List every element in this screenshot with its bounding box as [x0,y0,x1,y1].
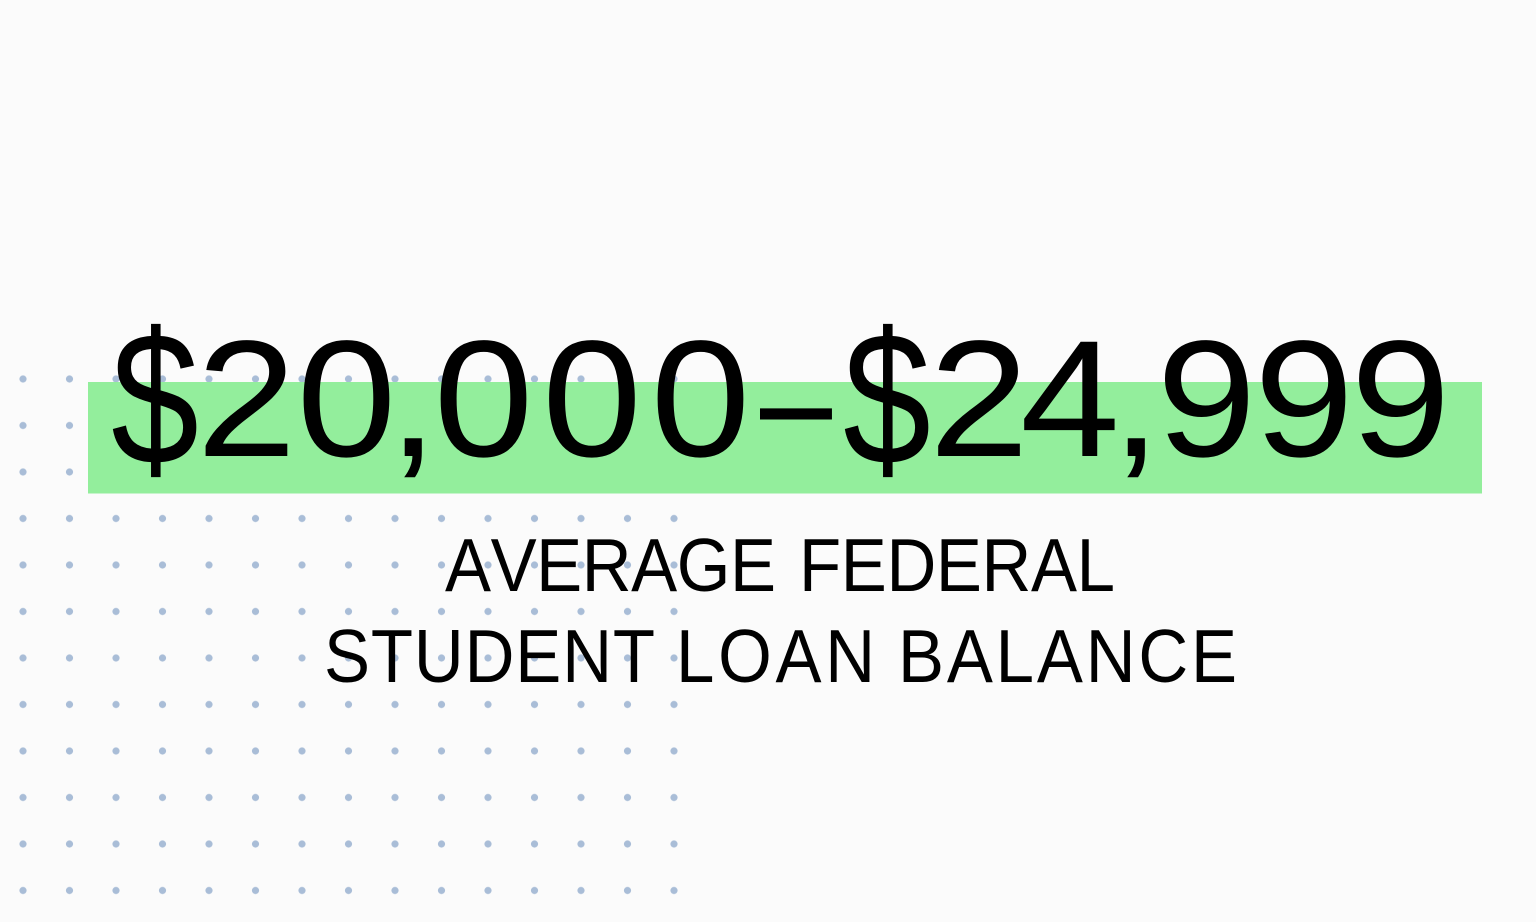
caption: LOAN [676,615,875,699]
headline value: $ [843,292,931,504]
headline value: $ [111,292,199,504]
headline value [111,292,1450,504]
headline value: 24,999 [929,306,1450,492]
caption: BALANCE [898,615,1237,699]
caption [324,524,1237,699]
caption: FEDERAL [799,524,1115,608]
caption: AVERAGE [445,524,776,608]
headline value: 20,000 [197,306,750,492]
green highlight bar [88,382,1482,494]
caption: STUDENT [324,615,655,699]
headline value: – [760,305,832,492]
dot grid background [0,356,698,914]
